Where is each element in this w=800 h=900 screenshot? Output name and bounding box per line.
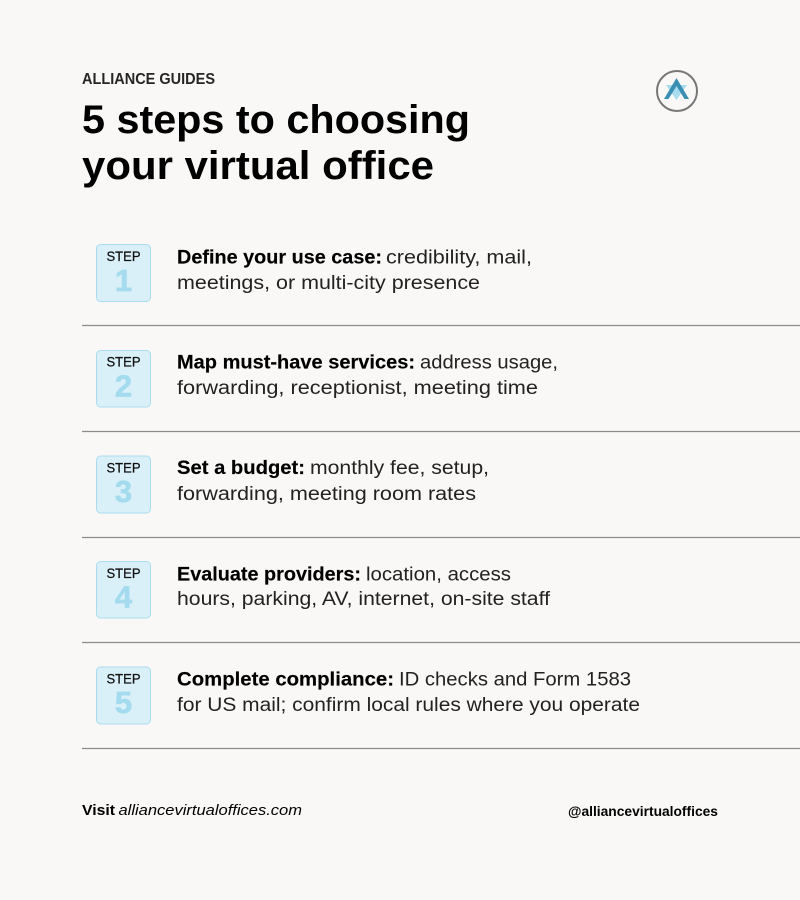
step 3 badge: 3 [115, 474, 132, 509]
title [82, 98, 470, 188]
step 4 badge [96, 562, 150, 618]
step 5 badge: STEP [106, 672, 140, 686]
step 2 badge: STEP [106, 354, 140, 370]
step 1 text: Define your use case: [177, 248, 382, 268]
step 2 badge [96, 350, 150, 407]
step 1 badge: STEP [106, 249, 140, 264]
step 5 badge [96, 667, 150, 724]
title: your virtual office [82, 144, 434, 188]
step 3 badge [96, 456, 150, 513]
step 5 text: for US mail; confirm local rules where you operate [177, 695, 640, 716]
eyebrow label: ALLIANCE GUIDES [82, 71, 215, 88]
title: 5 steps to choosing [82, 98, 470, 142]
step 1 text: credibility, mail, [386, 248, 532, 268]
step 5 badge: 5 [115, 685, 132, 720]
step 3 badge: STEP [106, 460, 140, 476]
step 2 text [177, 352, 558, 399]
step 2 badge: 2 [115, 368, 132, 404]
step 5 text [177, 670, 640, 716]
step 5 text: ID checks and Form 1583 [399, 670, 631, 690]
step 3 text: forwarding, meeting room rates [177, 484, 476, 505]
panel: step 4 [96, 562, 551, 618]
panel: step 1 [96, 244, 532, 302]
step 1 text: meetings, or multi-city presence [177, 273, 480, 294]
step 5 text: Complete compliance: [177, 670, 394, 690]
step 2 text: Map must-have services: [177, 352, 415, 374]
step 4 badge: STEP [106, 566, 140, 581]
panel: step 5 [96, 667, 640, 724]
step 3 text [177, 458, 489, 505]
step 3 text: monthly fee, setup, [310, 458, 489, 479]
step 4 text: hours, parking, AV, internet, on-site staff [177, 589, 551, 610]
step 3 text: Set a budget: [177, 458, 305, 479]
step 4 text [177, 564, 551, 610]
footer: social handle: @alliancevirtualoffices [568, 804, 718, 819]
footer: website: Visit [82, 803, 115, 819]
panel: step 2 [96, 350, 558, 407]
step 2 text: forwarding, receptionist, meeting time [177, 378, 538, 399]
footer: website: alliancevirtualoffices.com [118, 803, 302, 819]
step 4 badge: 4 [115, 580, 133, 614]
step 4 text: Evaluate providers: [177, 564, 361, 586]
step 1 text [177, 248, 532, 294]
icon: Alliance logo [657, 71, 697, 111]
step 2 text: address usage, [420, 352, 558, 374]
step 1 badge: 1 [115, 263, 132, 298]
panel: step 3 [96, 456, 489, 513]
step 4 text: location, access [366, 564, 511, 586]
step 1 badge [96, 244, 150, 302]
